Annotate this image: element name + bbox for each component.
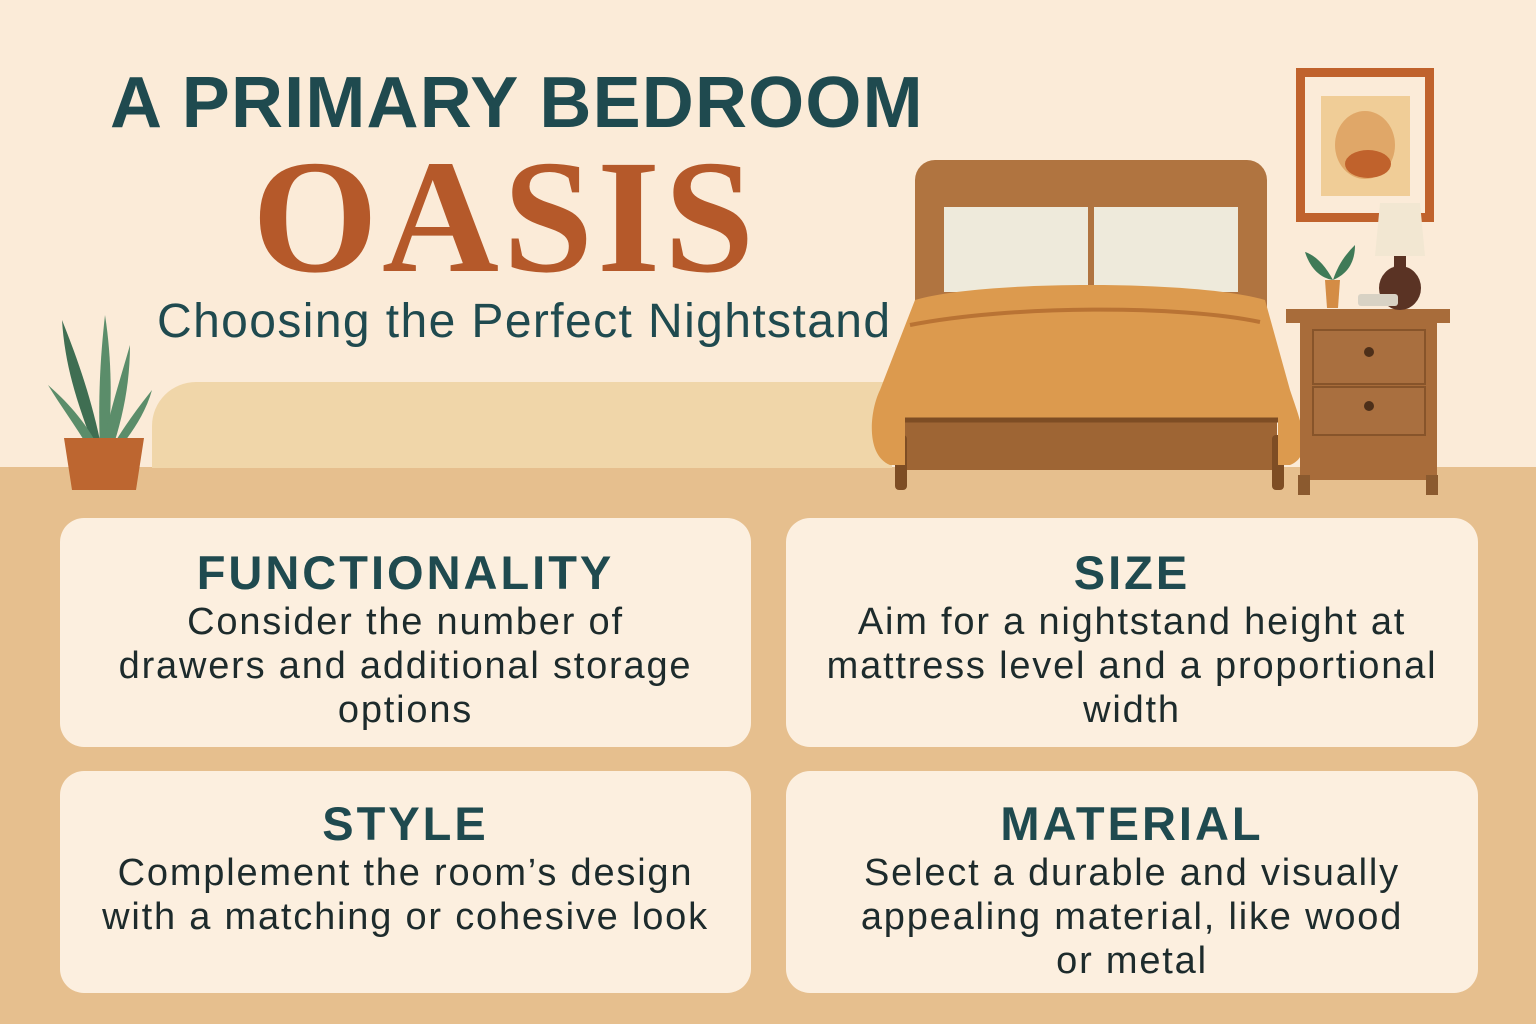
card: functionality: options <box>338 689 473 731</box>
card: style: STYLE <box>322 797 489 850</box>
card: size <box>786 518 1478 747</box>
lamp <box>1375 203 1425 256</box>
card: functionality <box>60 518 751 747</box>
sofa backdrop <box>152 382 892 468</box>
subtitle: Choosing the Perfect Nightstand <box>157 295 891 348</box>
floor <box>0 467 1536 1024</box>
card: functionality: Consider the number of <box>187 601 624 643</box>
bed base <box>905 420 1277 470</box>
card: functionality: drawers and additional storage <box>119 645 692 687</box>
headboard <box>915 160 1267 440</box>
heading: OASIS: OASIS <box>252 128 758 307</box>
card: size: width <box>1083 689 1181 731</box>
card: style: Complement the room’s design <box>118 852 693 894</box>
card: material: or metal <box>1056 940 1208 982</box>
card: style: with a matching or cohesive look <box>102 896 709 938</box>
nightstand <box>1286 309 1450 323</box>
small plant <box>1325 280 1340 308</box>
card: size: Aim for a nightstand height at <box>858 601 1406 643</box>
card: material <box>786 771 1478 993</box>
card: style <box>60 771 751 993</box>
card: size: SIZE <box>1074 546 1190 599</box>
illustration: bed <box>872 68 1450 495</box>
title: A PRIMARY BEDROOM <box>110 63 924 143</box>
card: functionality: FUNCTIONALITY <box>197 546 614 599</box>
blanket <box>872 285 1304 465</box>
illustration: plant <box>48 315 152 490</box>
frame picture <box>1296 68 1434 222</box>
card: material: MATERIAL <box>1000 797 1264 850</box>
card: size: mattress level and a proportional <box>827 645 1437 687</box>
card: material: appealing material, like wood <box>861 896 1403 938</box>
card: material: Select a durable and visually <box>864 852 1400 894</box>
